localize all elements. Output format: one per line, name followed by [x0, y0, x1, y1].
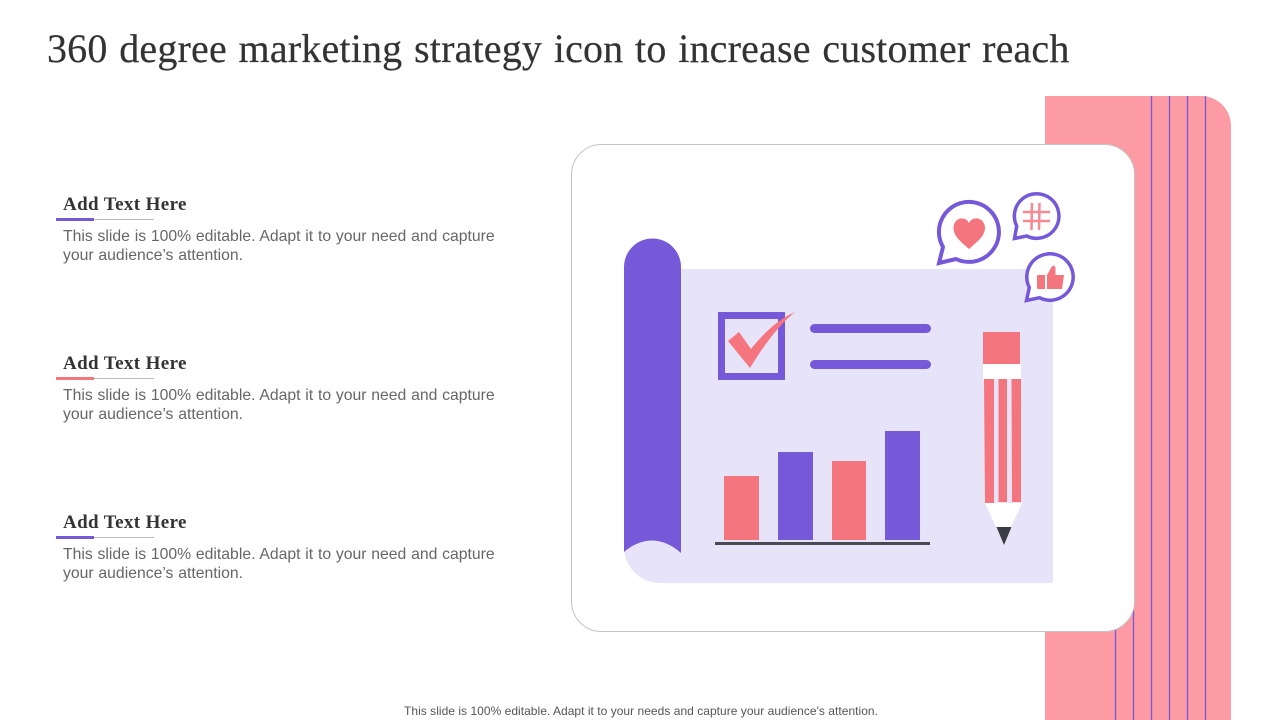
text block 3: your audience’s attention. — [63, 565, 243, 582]
text block 3 — [56, 512, 495, 582]
icon: heart speech bubble — [939, 202, 999, 263]
title: 360 degree marketing strategy icon to increase customer reach — [47, 26, 1070, 71]
document roll — [624, 239, 681, 553]
text block 2: This slide is 100% editable. Adapt it to your need and capture — [63, 387, 495, 404]
bar chart — [715, 431, 930, 545]
text block 2: Add Text Here — [63, 353, 187, 374]
pencil icon — [983, 332, 1022, 545]
checkbox icon — [718, 312, 795, 380]
document sheet — [624, 239, 1053, 583]
icon: hashtag speech bubble — [1014, 194, 1059, 238]
white card — [572, 144, 1134, 632]
text block 3: This slide is 100% editable. Adapt it to your need and capture — [63, 546, 495, 563]
text block 3: Add Text Here — [63, 512, 187, 533]
text lines — [810, 324, 931, 369]
text block 1: This slide is 100% editable. Adapt it to your need and capture — [63, 228, 495, 245]
footer note: This slide is 100% editable. Adapt it to your needs and capture your audience's attention. — [404, 704, 878, 718]
text block 1: Add Text Here — [63, 194, 187, 215]
text block 1: your audience’s attention. — [63, 247, 243, 264]
text block 1 — [56, 194, 495, 264]
text block 2: your audience’s attention. — [63, 406, 243, 423]
icon: thumbs up speech bubble — [1026, 254, 1073, 300]
text block 2 — [56, 353, 495, 423]
pink striped backdrop panel — [1045, 96, 1231, 720]
